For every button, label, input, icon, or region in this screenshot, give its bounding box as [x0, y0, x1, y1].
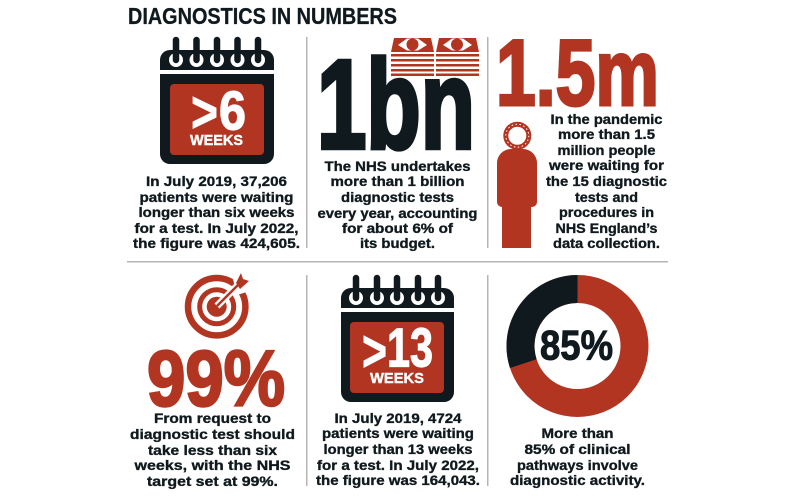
icon: person with ring head	[497, 124, 537, 248]
text: 1.5 million caption: tests and	[575, 190, 638, 205]
text: 1.5 million caption: In the pandemic	[550, 112, 663, 127]
chart: donut 85%	[507, 275, 634, 403]
donut value: 85%	[540, 322, 613, 368]
text: thirteen weeks caption	[316, 411, 480, 488]
icon: banknote stacks	[388, 36, 482, 77]
title: DIAGNOSTICS IN NUMBERS	[128, 3, 397, 29]
text: 1.5 million caption: NHS England’s	[556, 221, 658, 236]
text: 85% caption: More than	[542, 426, 614, 441]
icon: calendar six weeks: >	[191, 80, 218, 145]
text: one billion caption	[318, 159, 478, 251]
text: six weeks caption	[133, 174, 300, 251]
text: one billion caption: every year, accounting	[318, 206, 478, 221]
text: one billion caption: for about 6% of	[342, 221, 453, 236]
big number: 1bn: 1bn	[317, 34, 475, 175]
text: 1.5 million caption: more than 1.5	[558, 127, 655, 142]
panel: more than six weeks	[133, 40, 300, 251]
text: six weeks caption: for a test. In July 2022,	[134, 221, 298, 236]
icon: calendar thirteen weeks	[341, 278, 454, 402]
icon: calendar thirteen weeks: WEEKS	[370, 371, 424, 387]
text: 1.5 million caption	[546, 112, 667, 251]
big number: 1.5m: 1.5m	[496, 20, 659, 125]
icon: target with arrow	[188, 273, 250, 335]
text: 85% caption	[510, 426, 645, 488]
text: 1.5 million caption: procedures in	[559, 205, 654, 220]
icon: calendar six weeks: 6	[219, 80, 246, 142]
text: six weeks caption: In July 2019, 37,206	[146, 174, 287, 189]
text: six weeks caption: patients were waiting	[140, 190, 294, 205]
text: six weeks caption: the figure was 424,605.	[133, 236, 300, 251]
text: 99% caption: take less than six	[148, 443, 277, 458]
panel: more than 13 weeks	[316, 278, 480, 488]
text: 85% caption: pathways involve	[517, 458, 638, 473]
text: 99% caption: From request to	[154, 411, 271, 426]
icon: calendar thirteen weeks: >	[362, 319, 387, 384]
text: 99% caption: weeks, with the NHS	[133, 458, 290, 473]
text: 85% caption: diagnostic activity.	[510, 473, 645, 488]
text: thirteen weeks caption: the figure was 164,043.	[316, 473, 480, 488]
text: 1.5 million caption: the 15 diagnostic	[546, 174, 667, 189]
text: one billion caption: its budget.	[360, 236, 435, 251]
text: one billion caption: more than 1 billion	[330, 174, 464, 189]
text: one billion caption: The NHS undertakes	[324, 159, 471, 174]
text: 99% caption: target set at 99%.	[147, 474, 278, 489]
text: thirteen weeks caption: patients were waiting	[322, 426, 474, 441]
text: one billion caption: diagnostic tests	[341, 190, 454, 205]
panel: one billion tests	[317, 34, 482, 251]
text: 1.5 million caption: million people	[558, 143, 656, 158]
panel: 85% of pathways	[507, 275, 645, 488]
text: 1.5 million caption: data collection.	[553, 236, 660, 251]
panel: 99% target	[130, 273, 295, 489]
big number: 99%: 99%	[147, 334, 285, 422]
icon: calendar six weeks	[160, 40, 274, 164]
icon: calendar six weeks: WEEKS	[190, 133, 243, 149]
panel: 1.5 million waiting	[496, 20, 667, 251]
text: 85% caption: 85% of clinical	[524, 442, 630, 457]
text: thirteen weeks caption: longer than 13 weeks	[324, 442, 473, 457]
text: 99% caption: diagnostic test should	[130, 427, 295, 442]
text: thirteen weeks caption: In July 2019, 4724	[334, 411, 462, 426]
text: thirteen weeks caption: for a test. In July 2022,	[317, 458, 479, 473]
text: six weeks caption: longer than six weeks	[138, 205, 295, 220]
text: 99% caption	[130, 411, 295, 489]
icon: calendar thirteen weeks: 13	[387, 316, 433, 378]
text: 1.5 million caption: were waiting for	[548, 158, 665, 173]
